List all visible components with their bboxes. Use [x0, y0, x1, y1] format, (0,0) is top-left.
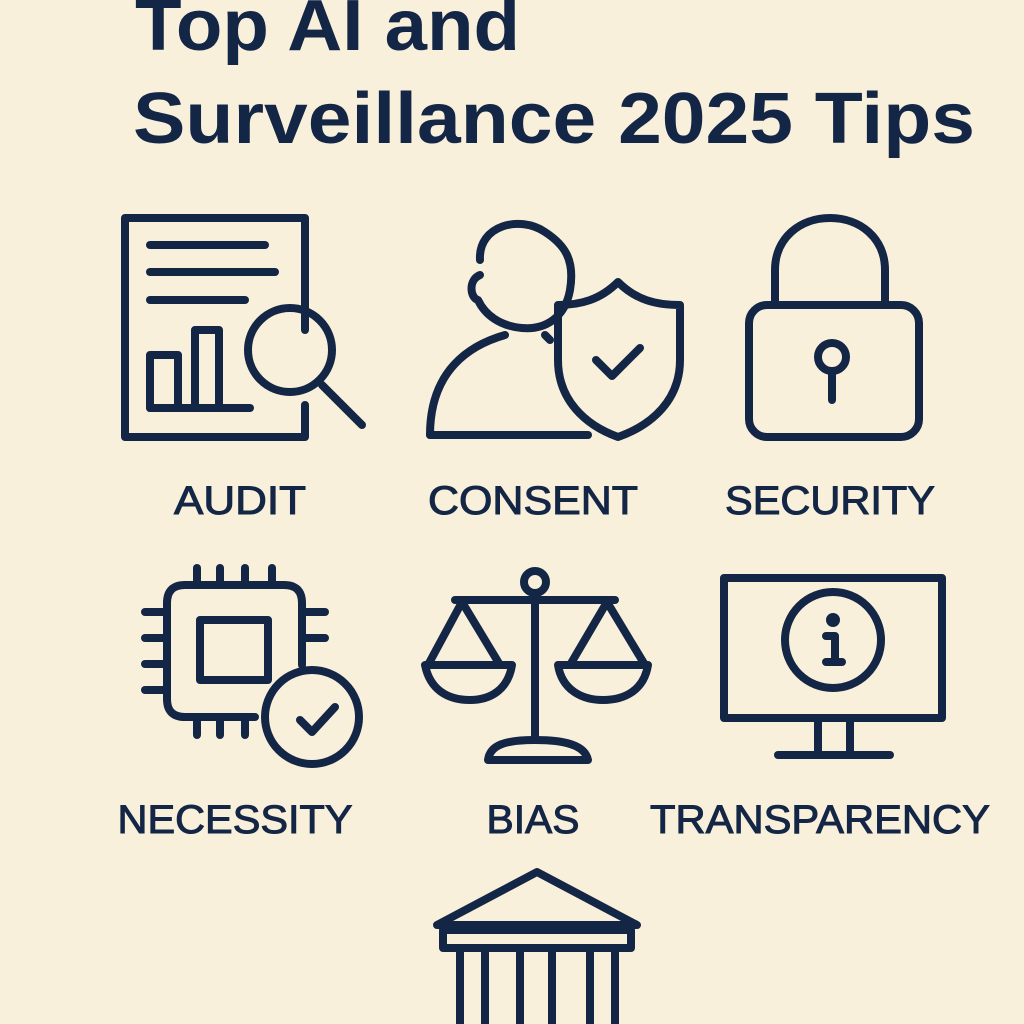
icon: audit document	[125, 218, 362, 437]
icon: building	[437, 872, 637, 1024]
labels: AUDIT	[174, 479, 306, 523]
labels: NECESSITY	[118, 798, 352, 842]
title: Surveillance 2025 Tips	[133, 79, 975, 159]
labels: SECURITY	[725, 479, 935, 523]
icon: necessity chip with check	[145, 568, 359, 764]
title	[133, 0, 975, 159]
icon: transparency monitor	[724, 578, 942, 755]
labels: BIAS	[486, 798, 580, 842]
labels	[118, 479, 990, 842]
labels: TRANSPARENCY	[650, 798, 990, 842]
labels: CONSENT	[428, 479, 638, 523]
icon: bias scale	[425, 571, 648, 760]
icon: consent person with shield	[430, 224, 680, 437]
icon: security lock	[749, 218, 919, 437]
